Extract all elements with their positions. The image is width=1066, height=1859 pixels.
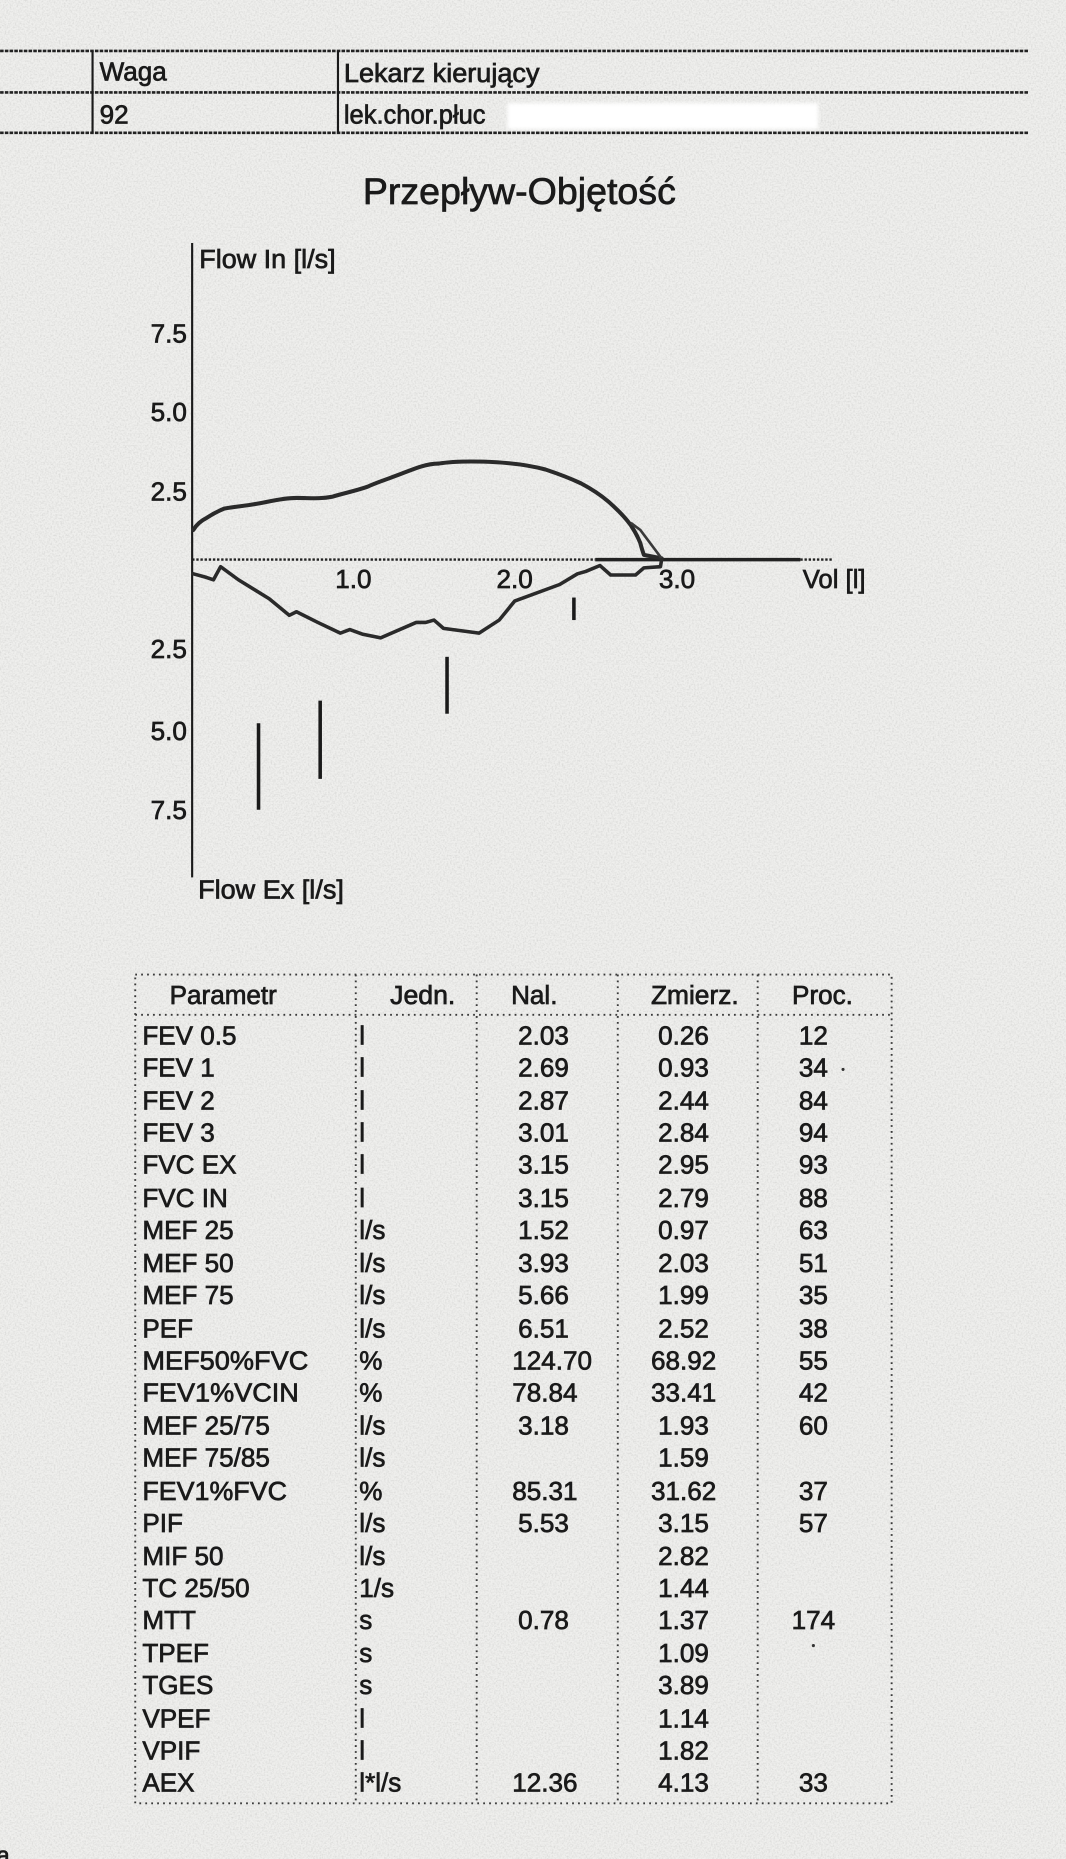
table body rows: FEV 3 (142, 1118, 215, 1148)
table body rows: MIF 50 (142, 1541, 224, 1571)
value: referring physician: lek.chor.płuc (344, 101, 486, 129)
table body rows: 51 (799, 1248, 828, 1278)
chart axes (192, 243, 834, 877)
table body rows: l/s (359, 1443, 385, 1473)
table body rows: PEF (142, 1313, 193, 1343)
y axis title: Flow In: Flow In [l/s] (199, 244, 336, 274)
table body rows: 3.18 (518, 1411, 569, 1441)
axis tick labels: 2.5 (151, 634, 187, 664)
table body rows: 63 (799, 1215, 828, 1245)
table body rows: 2.52 (658, 1313, 709, 1343)
table body rows: 0.97 (658, 1215, 709, 1245)
table header row: Zmierz. (651, 980, 739, 1010)
table body rows: 4.13 (658, 1767, 709, 1797)
table body rows: 33 (799, 1767, 828, 1797)
table header row: Nal. (511, 980, 557, 1010)
table body rows: 2.79 (658, 1183, 709, 1213)
table grid (135, 975, 892, 1803)
table body rows: 174 (792, 1605, 835, 1635)
table body rows: l (359, 1086, 365, 1116)
axis tick labels: 2.5 (151, 476, 187, 506)
table body rows: FEV 1 (142, 1053, 215, 1083)
table body rows: 12.36 (512, 1767, 578, 1797)
table body rows: MEF 25 (142, 1215, 234, 1245)
table body rows: FEV 0.5 (142, 1021, 237, 1051)
table body rows: l (359, 1703, 365, 1733)
table body rows: l*l/s (359, 1767, 401, 1797)
table body rows: 1.82 (658, 1735, 709, 1765)
table body rows: % (359, 1377, 383, 1407)
table body rows: FEV1%VCIN (142, 1377, 299, 1407)
table body rows: MEF 75/85 (142, 1443, 270, 1473)
table body rows: l (359, 1150, 365, 1180)
table body rows: 1.99 (658, 1280, 709, 1310)
table body rows: 5.66 (518, 1280, 569, 1310)
header table (0, 51, 1029, 133)
table header row: Parametr (170, 980, 277, 1010)
table body rows: MEF 50 (142, 1248, 234, 1278)
table body rows: 94 (799, 1118, 828, 1148)
table body rows: 1.93 (658, 1411, 709, 1441)
table body rows: 34 (799, 1053, 828, 1083)
expiratory flow curve (193, 560, 662, 638)
x axis title: Vol: Vol [l] (803, 564, 866, 594)
table body rows: 0.26 (658, 1021, 709, 1051)
table body rows: l/s (359, 1508, 385, 1538)
table body rows: 84 (799, 1086, 828, 1116)
axis tick labels: 7.5 (151, 795, 187, 825)
table body rows: TPEF (142, 1638, 209, 1668)
table body rows: l/s (359, 1541, 385, 1571)
table body rows: 3.93 (518, 1248, 569, 1278)
table body rows: FVC EX (142, 1150, 237, 1180)
table body rows: 42 (799, 1377, 828, 1407)
table body rows: 35 (799, 1280, 828, 1310)
table body rows: TC 25/50 (142, 1573, 250, 1603)
table body rows: 88 (799, 1183, 828, 1213)
table body rows: s (359, 1670, 372, 1700)
table body rows: 3.15 (518, 1150, 569, 1180)
table body rows: l (359, 1053, 365, 1083)
table body rows: l/s (359, 1280, 385, 1310)
table body rows: 1.09 (658, 1638, 709, 1668)
table body rows: 2.69 (518, 1053, 569, 1083)
table body rows: 2.44 (658, 1086, 709, 1116)
table body rows: 0.93 (658, 1053, 709, 1083)
column label: Waga: Waga (100, 57, 167, 87)
table body rows: % (359, 1476, 383, 1506)
axis tick labels: 3.0 (659, 564, 695, 594)
table body rows: FEV 2 (142, 1086, 215, 1116)
table body rows: 60 (799, 1411, 828, 1441)
axis tick labels: 5.0 (151, 397, 187, 427)
table body rows: MEF 25/75 (142, 1411, 270, 1441)
axis tick labels: 1.0 (335, 564, 372, 594)
table body rows: l/s (359, 1248, 385, 1278)
table body rows: VPEF (142, 1703, 210, 1733)
table body rows: FVC IN (142, 1183, 228, 1213)
table body rows: 37 (799, 1476, 828, 1506)
table body rows: 3.15 (658, 1508, 709, 1538)
table body rows: 3.01 (518, 1118, 569, 1148)
table body rows: 55 (799, 1345, 828, 1375)
parameter table (135, 975, 892, 1803)
table body rows: 6.51 (518, 1313, 569, 1343)
table body rows: 12 (799, 1021, 828, 1051)
table body rows: 31.62 (651, 1476, 716, 1506)
table body rows: 5.53 (518, 1508, 569, 1538)
table body rows: s (359, 1605, 372, 1635)
table body rows: 0.78 (518, 1605, 569, 1635)
table body rows: 2.82 (658, 1541, 709, 1571)
table body rows: l (359, 1183, 365, 1213)
flow-volume chart (151, 243, 866, 905)
table body rows: 3.89 (658, 1670, 709, 1700)
table body rows (142, 1021, 835, 1797)
table header row: Proc. (792, 980, 853, 1010)
table body rows: 68.92 (651, 1345, 716, 1375)
table body rows: 33.41 (651, 1377, 716, 1407)
table body rows: % (359, 1345, 383, 1375)
column label: Lekarz kierujący: Lekarz kierujący (344, 60, 540, 88)
table header row (170, 980, 853, 1010)
secondary curve loop near end of volume (631, 523, 662, 558)
axis tick labels: 7.5 (151, 319, 187, 349)
table body rows: 2.95 (658, 1150, 709, 1180)
table body rows: 1.59 (658, 1443, 709, 1473)
table body rows: 2.03 (518, 1021, 569, 1051)
stray scan specks (812, 1068, 845, 1647)
table body rows: 2.84 (658, 1118, 709, 1148)
table body rows: 1/s (359, 1573, 394, 1603)
table body rows: 3.15 (518, 1183, 569, 1213)
axis tick labels: 5.0 (151, 716, 187, 746)
table body rows: 124.70 (512, 1345, 592, 1375)
predicted value markers (259, 598, 574, 810)
table body rows: 57 (799, 1508, 828, 1538)
table body rows: l/s (359, 1411, 385, 1441)
table body rows: 2.87 (518, 1086, 569, 1116)
table body rows: 2.03 (658, 1248, 709, 1278)
table body rows: l (359, 1735, 365, 1765)
table body rows: l/s (359, 1215, 385, 1245)
table body rows: FEV1%FVC (142, 1476, 287, 1506)
table body rows: MTT (142, 1605, 196, 1635)
table body rows: l (359, 1118, 365, 1148)
table body rows: TGES (142, 1670, 213, 1700)
table body rows: AEX (142, 1767, 195, 1797)
table body rows: 38 (799, 1313, 828, 1343)
redacted name patch (508, 103, 818, 129)
table body rows: MEF 75 (142, 1280, 234, 1310)
table body rows: VPIF (142, 1735, 200, 1765)
table body rows: 1.52 (518, 1215, 569, 1245)
axis tick labels: 2.0 (496, 564, 533, 594)
table body rows: 1.44 (658, 1573, 709, 1603)
inspiratory flow curve (193, 461, 662, 558)
table body rows: l (359, 1021, 365, 1051)
table body rows: 78.84 (512, 1377, 578, 1407)
table body rows: 1.14 (658, 1703, 709, 1733)
table body rows: PIF (142, 1508, 183, 1538)
table body rows: MEF50%FVC (142, 1345, 308, 1375)
table body rows: 1.37 (658, 1605, 709, 1635)
value: 92: 92 (100, 99, 129, 129)
table body rows: 93 (799, 1150, 828, 1180)
axis tick labels (151, 319, 695, 825)
table body rows: 85.31 (512, 1476, 578, 1506)
y axis title: Flow Ex: Flow Ex [l/s] (198, 875, 344, 905)
title: Przepływ-Objętość (363, 170, 676, 212)
table body rows: l/s (359, 1313, 385, 1343)
table body rows: s (359, 1638, 372, 1668)
table header row: Jedn. (390, 980, 455, 1010)
